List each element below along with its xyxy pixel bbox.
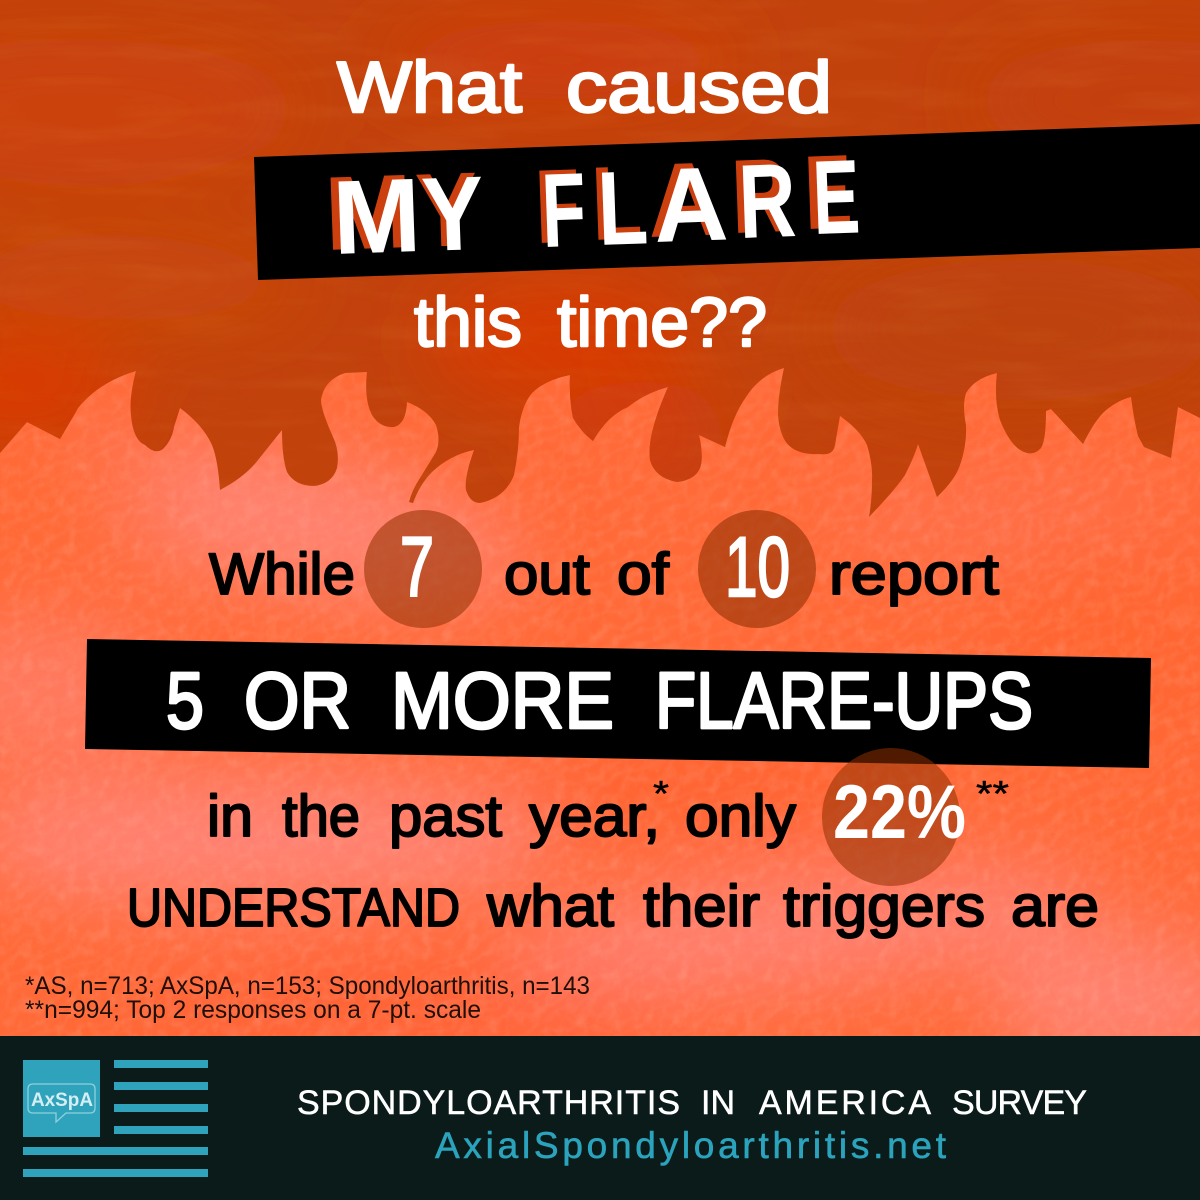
text: in the past year, only: in (207, 784, 253, 849)
footer title: SURVEY (952, 1084, 1087, 1122)
text: UNDERSTAND what their triggers are: their (643, 874, 760, 939)
footer title: IN (701, 1084, 735, 1122)
text: in the past year, only: year, (529, 784, 660, 849)
text: UNDERSTAND what their triggers are: are (1011, 874, 1099, 939)
footer title: AMERICA (759, 1084, 931, 1122)
black banner: 5 or more flare-ups: MORE (391, 656, 614, 745)
text: in the past year, only: ** (976, 773, 1009, 814)
MY FLARE white lettering: A (652, 145, 730, 265)
MY FLARE white lettering: R (737, 142, 798, 261)
MY FLARE orange shadow: A (646, 140, 724, 260)
footer url: AxialSpondyloarthritis.net (435, 1125, 947, 1166)
black banner: 5 or more flare-ups: OR (244, 656, 351, 745)
footer band (0, 1036, 1200, 1200)
MY FLARE orange shadow: L (590, 144, 644, 263)
text: in the past year, only: past (389, 784, 502, 849)
heading: What caused: caused (566, 48, 832, 128)
MY FLARE orange shadow: Y (414, 151, 480, 270)
circle: 22%: 22% (833, 770, 966, 855)
icon: AxSpA flag logo: AxSpA (31, 1090, 93, 1111)
text: in the past year, only: * (653, 773, 669, 814)
text: UNDERSTAND what their triggers are (127, 874, 1099, 939)
black banner: 5 or more flare-ups: FLARE-UPS (655, 656, 1033, 745)
footer title: SPONDYLOARTHRITIS (297, 1084, 680, 1122)
MY FLARE orange shadow (323, 133, 854, 273)
text: in the past year, only: the (282, 784, 360, 849)
black banner: MY FLARE (254, 124, 1200, 280)
heading: What caused (337, 48, 832, 128)
text: UNDERSTAND what their triggers are: triggers (783, 874, 985, 939)
black banner: 5 or more flare-ups: 5 (166, 656, 204, 745)
MY FLARE white lettering: M (331, 157, 423, 277)
footnotes (25, 972, 590, 1024)
text: in the past year, only (207, 773, 1009, 849)
text: While out of report: of (617, 542, 670, 607)
text: While out of report (209, 542, 999, 607)
heading: this time?? (414, 283, 767, 361)
text: UNDERSTAND what their triggers are: UNDERSTAND (127, 878, 460, 938)
background: lower flame field (0, 340, 1200, 1070)
circle: 22% (822, 748, 966, 886)
text: While out of report: out (504, 542, 590, 607)
MY FLARE white lettering: E (811, 138, 862, 257)
MY FLARE white lettering (331, 138, 862, 277)
text: While out of report: report (829, 542, 999, 607)
circle: 10 (698, 510, 816, 628)
text: UNDERSTAND what their triggers are: what (486, 874, 614, 939)
icon: AxSpA flag logo (23, 1060, 208, 1177)
black banner: 5 or more flare-ups (85, 639, 1151, 768)
MY FLARE orange shadow: M (323, 153, 415, 273)
MY FLARE orange shadow: E (803, 133, 854, 252)
heading: this time??: time?? (557, 283, 767, 361)
circle: 7 (364, 510, 482, 628)
heading: What caused: What (337, 48, 522, 128)
footer title (297, 1084, 1087, 1122)
heading: this time??: this (414, 283, 522, 361)
circle: 10: 10 (725, 520, 790, 614)
text: in the past year, only: only (685, 784, 796, 849)
MY FLARE orange shadow: F (534, 148, 582, 266)
text: While out of report: While (209, 542, 355, 607)
MY FLARE orange shadow: R (730, 137, 791, 256)
background: dark upper flame layer (0, 0, 1200, 530)
footnotes: **n=994; Top 2 responses on a 7-pt. scale (25, 996, 481, 1024)
MY FLARE white lettering: L (596, 149, 650, 268)
MY FLARE white lettering: Y (420, 155, 486, 274)
MY FLARE white lettering: F (540, 152, 588, 270)
footnotes: *AS, n=713; AxSpA, n=153; Spondyloarthritis, n=143 (25, 972, 590, 1000)
circle: 7: 7 (400, 520, 434, 614)
